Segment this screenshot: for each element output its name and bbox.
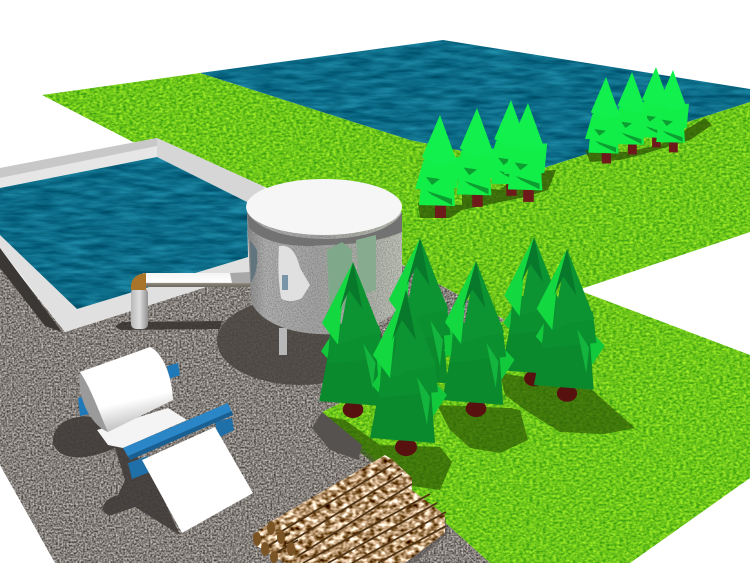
storage tank <box>246 179 402 355</box>
pipe column <box>131 288 148 329</box>
near tree group <box>319 237 605 456</box>
shadows of the near trees <box>320 373 635 490</box>
tree <box>488 100 530 196</box>
tree <box>415 115 460 218</box>
log pile <box>252 455 448 563</box>
log pile shadow <box>252 515 448 563</box>
tree <box>653 70 689 152</box>
tree <box>504 103 547 202</box>
blue roller <box>123 403 233 460</box>
tree <box>386 238 459 396</box>
log separations <box>268 465 446 563</box>
tree <box>612 72 648 154</box>
pipe <box>131 272 250 329</box>
tree <box>534 249 605 402</box>
shadow of tank <box>217 297 383 385</box>
log ends <box>253 521 295 563</box>
shadow of pipe <box>115 321 222 330</box>
pool water <box>0 157 248 309</box>
pipe run <box>143 273 250 287</box>
pipe elbow <box>131 273 146 290</box>
tank reflections <box>278 246 310 301</box>
tree <box>502 237 571 386</box>
far tree group right <box>585 67 689 164</box>
lower roller supports <box>128 456 150 479</box>
pool outer wall <box>0 138 265 332</box>
shadows of the far trees <box>418 118 712 218</box>
tree <box>636 67 672 147</box>
paper machine <box>78 347 253 533</box>
settling pool <box>0 138 265 332</box>
log pile body <box>253 455 445 563</box>
gravel ground <box>0 250 505 563</box>
far tree group left <box>415 100 547 218</box>
shadow of tree on gravel <box>312 412 362 460</box>
paper sheet <box>142 427 253 533</box>
tree <box>585 77 623 164</box>
lake <box>200 40 750 168</box>
roll axle <box>167 363 180 379</box>
tank body <box>247 212 402 334</box>
tree <box>319 262 392 418</box>
tree <box>370 290 447 456</box>
tank leg <box>279 328 287 355</box>
tank shade band <box>247 212 402 246</box>
paper machine shadow <box>53 417 180 535</box>
tank lid <box>246 179 402 235</box>
tree <box>453 108 496 207</box>
paper strip <box>97 408 187 448</box>
paper roll <box>80 347 173 432</box>
tree <box>442 261 515 417</box>
